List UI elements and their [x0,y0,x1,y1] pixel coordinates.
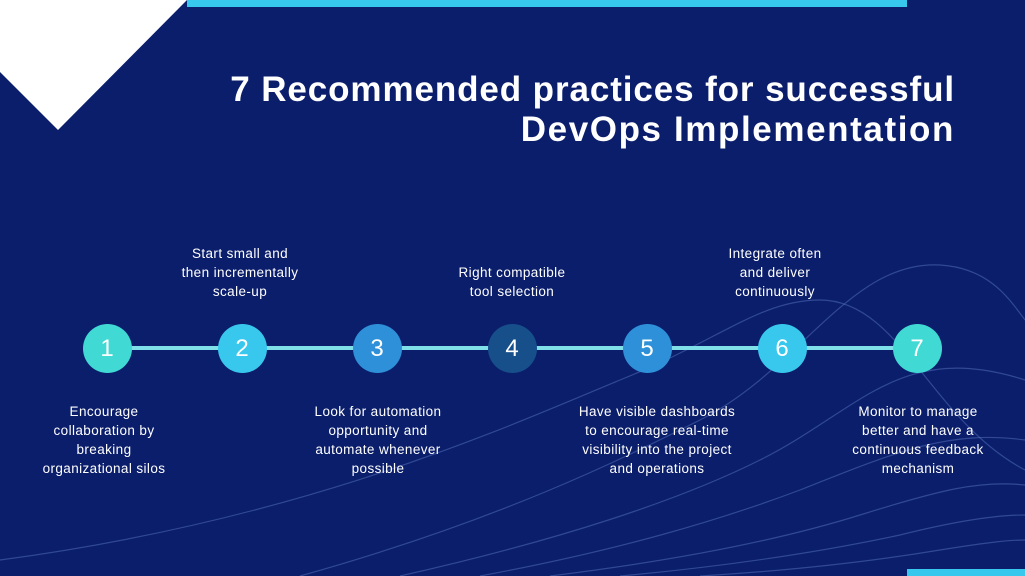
step 6 text: and deliver [740,265,810,280]
step 3 circle [352,324,402,372]
step 5 circle [622,324,672,372]
step 4 text: Right compatible [459,265,565,280]
step 3 text: opportunity and [328,423,428,438]
step 4 text [459,265,565,299]
step 2 text [182,246,298,299]
step 3 text: possible [352,461,404,476]
step 6 text [728,246,822,299]
step 7 text: better and have a [862,423,974,438]
step 1 circle [82,324,132,372]
top accent bar [187,0,907,7]
step 7 text: continuous feedback [852,442,984,457]
decorative white triangle [0,0,187,130]
step 6 circle [758,324,806,372]
step 5 circle: 5 [640,334,654,362]
step 2 text: Start small and [192,246,288,261]
step 1 text: organizational silos [43,461,165,476]
step 5 text: to encourage real-time [585,423,729,438]
step 1 text [43,404,165,476]
step 7 circle [892,324,942,372]
step 2 text: scale-up [213,284,267,299]
step 2 circle [218,324,266,372]
step 4 circle [488,324,536,372]
step 5 text [579,404,735,476]
step 3 text: Look for automation [315,404,441,419]
step 7 circle: 7 [910,334,924,362]
title: DevOps Implementation [521,110,955,149]
step 1 text: Encourage [70,404,138,419]
step 3 text [315,404,441,476]
step 5 text: visibility into the project [582,442,732,457]
timeline line [107,346,917,350]
step 5 text: Have visible dashboards [579,404,735,419]
step 3 circle: 3 [370,334,384,362]
step 4 text: tool selection [470,284,554,299]
step 6 text: continuously [735,284,815,299]
bottom accent bar [907,569,1025,576]
step 5 text: and operations [610,461,704,476]
step 6 text: Integrate often [728,246,822,261]
title: 7 Recommended practices for successful [230,70,955,109]
title [230,70,955,149]
step 1 text: collaboration by [54,423,154,438]
step 2 circle: 2 [235,334,249,362]
step 3 text: automate whenever [315,442,441,457]
step 1 circle: 1 [100,334,114,362]
step 7 text [852,404,984,476]
step 7 text: mechanism [882,461,954,476]
step 7 text: Monitor to manage [858,404,978,419]
step 2 text: then incrementally [182,265,298,280]
step 1 text: breaking [76,442,132,457]
step 4 circle: 4 [505,334,519,362]
step 6 circle: 6 [775,334,789,362]
